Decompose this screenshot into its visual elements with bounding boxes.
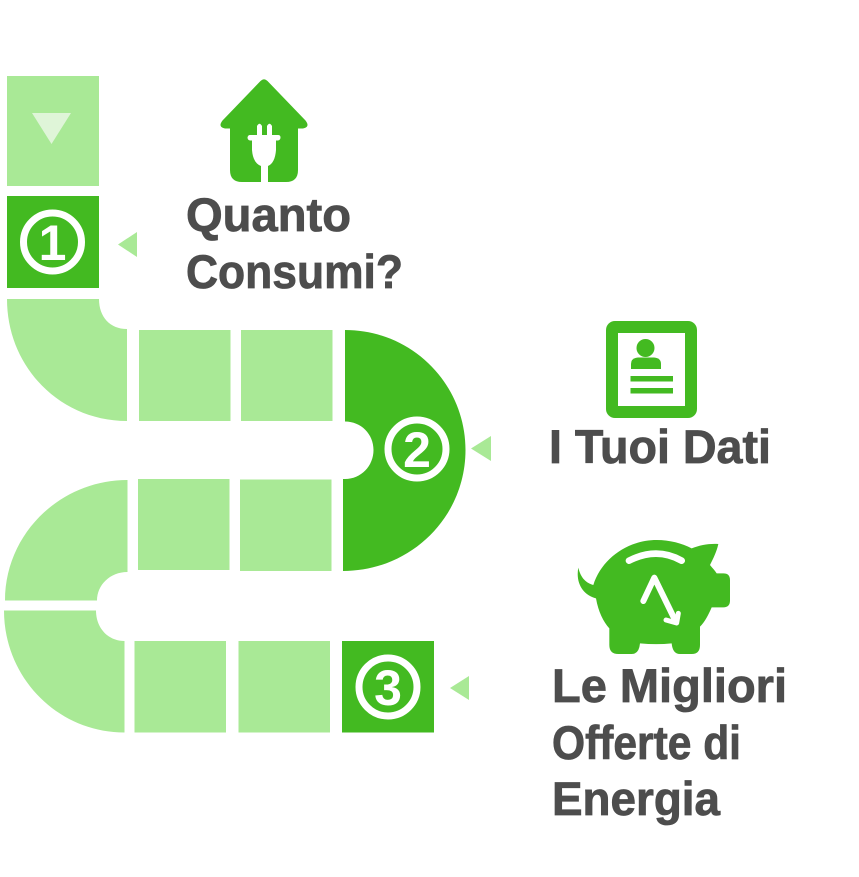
curve tile lower left lower <box>4 610 124 732</box>
track tile <box>238 641 330 732</box>
track tile <box>240 480 332 571</box>
heading: Le Migliori Offerte di Energia: Offerte di <box>552 716 741 769</box>
pointer arrow step 2 <box>471 436 491 461</box>
icon: house with plug <box>220 79 308 182</box>
heading: Le Migliori Offerte di Energia: Le Migliori <box>552 659 787 712</box>
step 1 tile <box>7 196 99 288</box>
heading: Le Migliori Offerte di Energia <box>552 659 787 825</box>
heading: I Tuoi Dati: I Tuoi Dati <box>549 420 771 473</box>
track tile <box>139 330 230 421</box>
heading: Quanto Consumi?: Consumi? <box>186 245 403 298</box>
step 3 tile <box>342 641 434 732</box>
path: board game track <box>4 76 466 732</box>
curve tile lower left upper <box>5 480 128 600</box>
heading: Quanto Consumi?: Quanto <box>186 188 351 241</box>
heading: Le Migliori Offerte di Energia: Energia <box>552 772 721 825</box>
pointer arrow step 3 <box>450 676 469 700</box>
start tile with down arrow <box>7 76 99 186</box>
step 2 curved tile: 2 <box>403 422 431 478</box>
heading: Quanto Consumi? <box>186 188 403 298</box>
icon: piggy bank <box>578 540 730 654</box>
track tile <box>241 330 332 421</box>
track tile <box>138 479 230 570</box>
icon: personal data card <box>606 321 697 418</box>
curve tile top left <box>7 299 127 421</box>
step 1 tile: 1 <box>39 215 66 271</box>
pointer arrow step 1 <box>118 232 137 257</box>
track tile <box>134 641 226 732</box>
step 3 tile: 3 <box>374 660 402 716</box>
step 2 curved tile <box>343 330 466 571</box>
